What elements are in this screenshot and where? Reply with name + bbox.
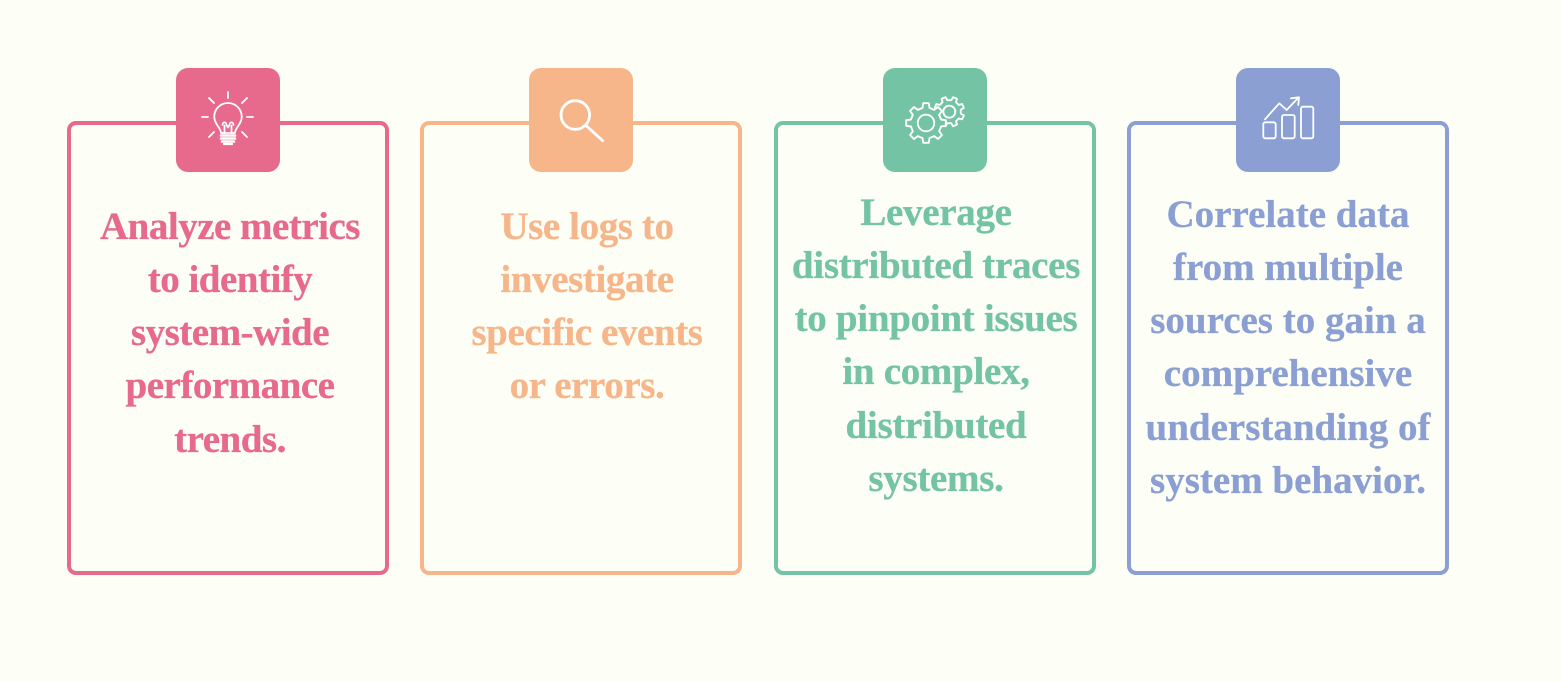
text: correlate data: Correlate data (1167, 192, 1409, 236)
text: use logs: specific events (471, 311, 703, 354)
text: distributed traces (792, 190, 1080, 500)
text: use logs: Use logs to (500, 204, 674, 248)
text: analyze metrics: Analyze metrics (100, 204, 360, 248)
text: analyze metrics: performance (126, 364, 334, 407)
text: correlate data: sources to gain a (1150, 299, 1426, 342)
text: distributed traces: to pinpoint issues (795, 297, 1077, 340)
icon: gears (883, 68, 987, 172)
icon: light bulb (176, 68, 280, 172)
text: use logs (471, 204, 703, 407)
text: analyze metrics: trends. (174, 418, 286, 461)
text: correlate data: comprehensive (1164, 352, 1412, 395)
text: distributed traces: Leverage (860, 190, 1012, 234)
text: analyze metrics: system-wide (131, 311, 329, 354)
text: use logs: or errors. (510, 364, 664, 407)
panel: use logs (420, 121, 742, 575)
text: correlate data: system behavior. (1150, 459, 1426, 502)
text: distributed traces: distributed traces (792, 244, 1080, 287)
panel: distributed traces (774, 121, 1096, 575)
panel: correlate data (1127, 121, 1449, 575)
icon: magnifying glass (529, 68, 633, 172)
text: distributed traces: in complex, (842, 350, 1030, 393)
text: use logs: investigate (500, 258, 674, 301)
icon: bar chart with arrow (1236, 68, 1340, 172)
text: analyze metrics (100, 204, 360, 461)
text: distributed traces: systems. (868, 457, 1004, 500)
text: correlate data: understanding of (1146, 406, 1430, 449)
text: correlate data (1146, 192, 1431, 502)
text: correlate data: from multiple (1173, 246, 1403, 289)
text: analyze metrics: to identify (148, 258, 312, 301)
text: distributed traces: distributed (846, 404, 1026, 447)
panel: analyze metrics (67, 121, 389, 575)
